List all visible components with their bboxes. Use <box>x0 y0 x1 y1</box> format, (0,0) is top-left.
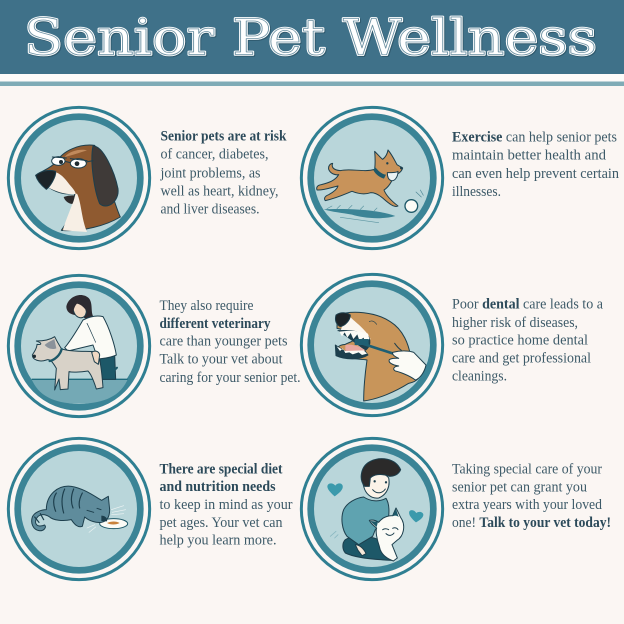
text: senior pets at risk <box>160 128 287 218</box>
icon: running dog with ball <box>301 107 443 249</box>
text: exercise <box>452 130 620 200</box>
title: Senior Pet Wellness <box>25 10 598 68</box>
text: dental care: higher risk of diseases, <box>452 315 578 331</box>
text: diet and nutrition <box>160 462 293 548</box>
panel: veterinary care <box>8 275 301 417</box>
text: diet and nutrition: and nutrition needs <box>160 479 276 495</box>
text: exercise: Exercise can help senior pets <box>452 130 617 146</box>
text: dental care: so practice home dental <box>452 332 588 348</box>
text: diet and nutrition: pet ages. Your vet can <box>160 515 283 531</box>
text: dental care: cleanings. <box>452 368 507 384</box>
panel: senior pet risks <box>8 107 287 249</box>
text: diet and nutrition: to keep in mind as your <box>160 497 293 513</box>
panel: dental care <box>301 274 604 416</box>
text: senior pets at risk: and liver diseases. <box>160 202 260 218</box>
title: Senior Pet Wellness <box>24 8 597 66</box>
text: senior pets at risk: well as heart, kidney, <box>160 184 278 200</box>
text: extra years together: Taking special care of your <box>452 462 602 478</box>
icon: owner hugging cat <box>301 438 443 580</box>
text: veterinary care: care than younger pets <box>160 334 288 350</box>
panel: exercise <box>301 107 620 249</box>
text: senior pets at risk: of cancer, diabetes, <box>160 146 268 162</box>
text: veterinary care <box>160 298 300 386</box>
text: extra years together <box>452 462 611 531</box>
text: veterinary care: caring for your senior pet. <box>160 370 300 386</box>
text: dental care: Poor dental care leads to a <box>452 296 604 312</box>
text: senior pets at risk: joint problems, as <box>160 166 261 182</box>
icon: cat eating <box>8 438 150 580</box>
text: diet and nutrition: help you learn more. <box>160 532 276 548</box>
text: veterinary care: Talk to your vet about <box>160 352 282 368</box>
text: senior pets at risk: Senior pets are at risk <box>160 128 287 144</box>
text: extra years together: senior pet can grant you <box>452 480 587 496</box>
text: exercise: illnesses. <box>452 184 501 200</box>
panel: extra years together <box>301 438 611 580</box>
text: extra years together: extra years with your loved <box>452 497 603 513</box>
title banner <box>0 0 624 86</box>
text: diet and nutrition: There are special diet <box>160 462 283 478</box>
text: veterinary care: They also require <box>160 298 254 314</box>
text: dental care <box>452 296 604 384</box>
panel: diet and nutrition <box>8 438 293 580</box>
title: Senior Pet Wellness <box>24 8 597 66</box>
text: extra years together: one! Talk to your vet today! <box>452 515 611 531</box>
text: dental care: care and get professional <box>452 350 591 366</box>
text: veterinary care: different veterinary <box>160 316 271 332</box>
text: exercise: can even help prevent certain <box>452 166 620 182</box>
icon: dog with glasses <box>8 107 150 249</box>
icon: dog teeth brushing <box>301 274 443 416</box>
text: exercise: maintain better health and <box>452 148 607 164</box>
icon: vet examining dog <box>8 275 150 417</box>
